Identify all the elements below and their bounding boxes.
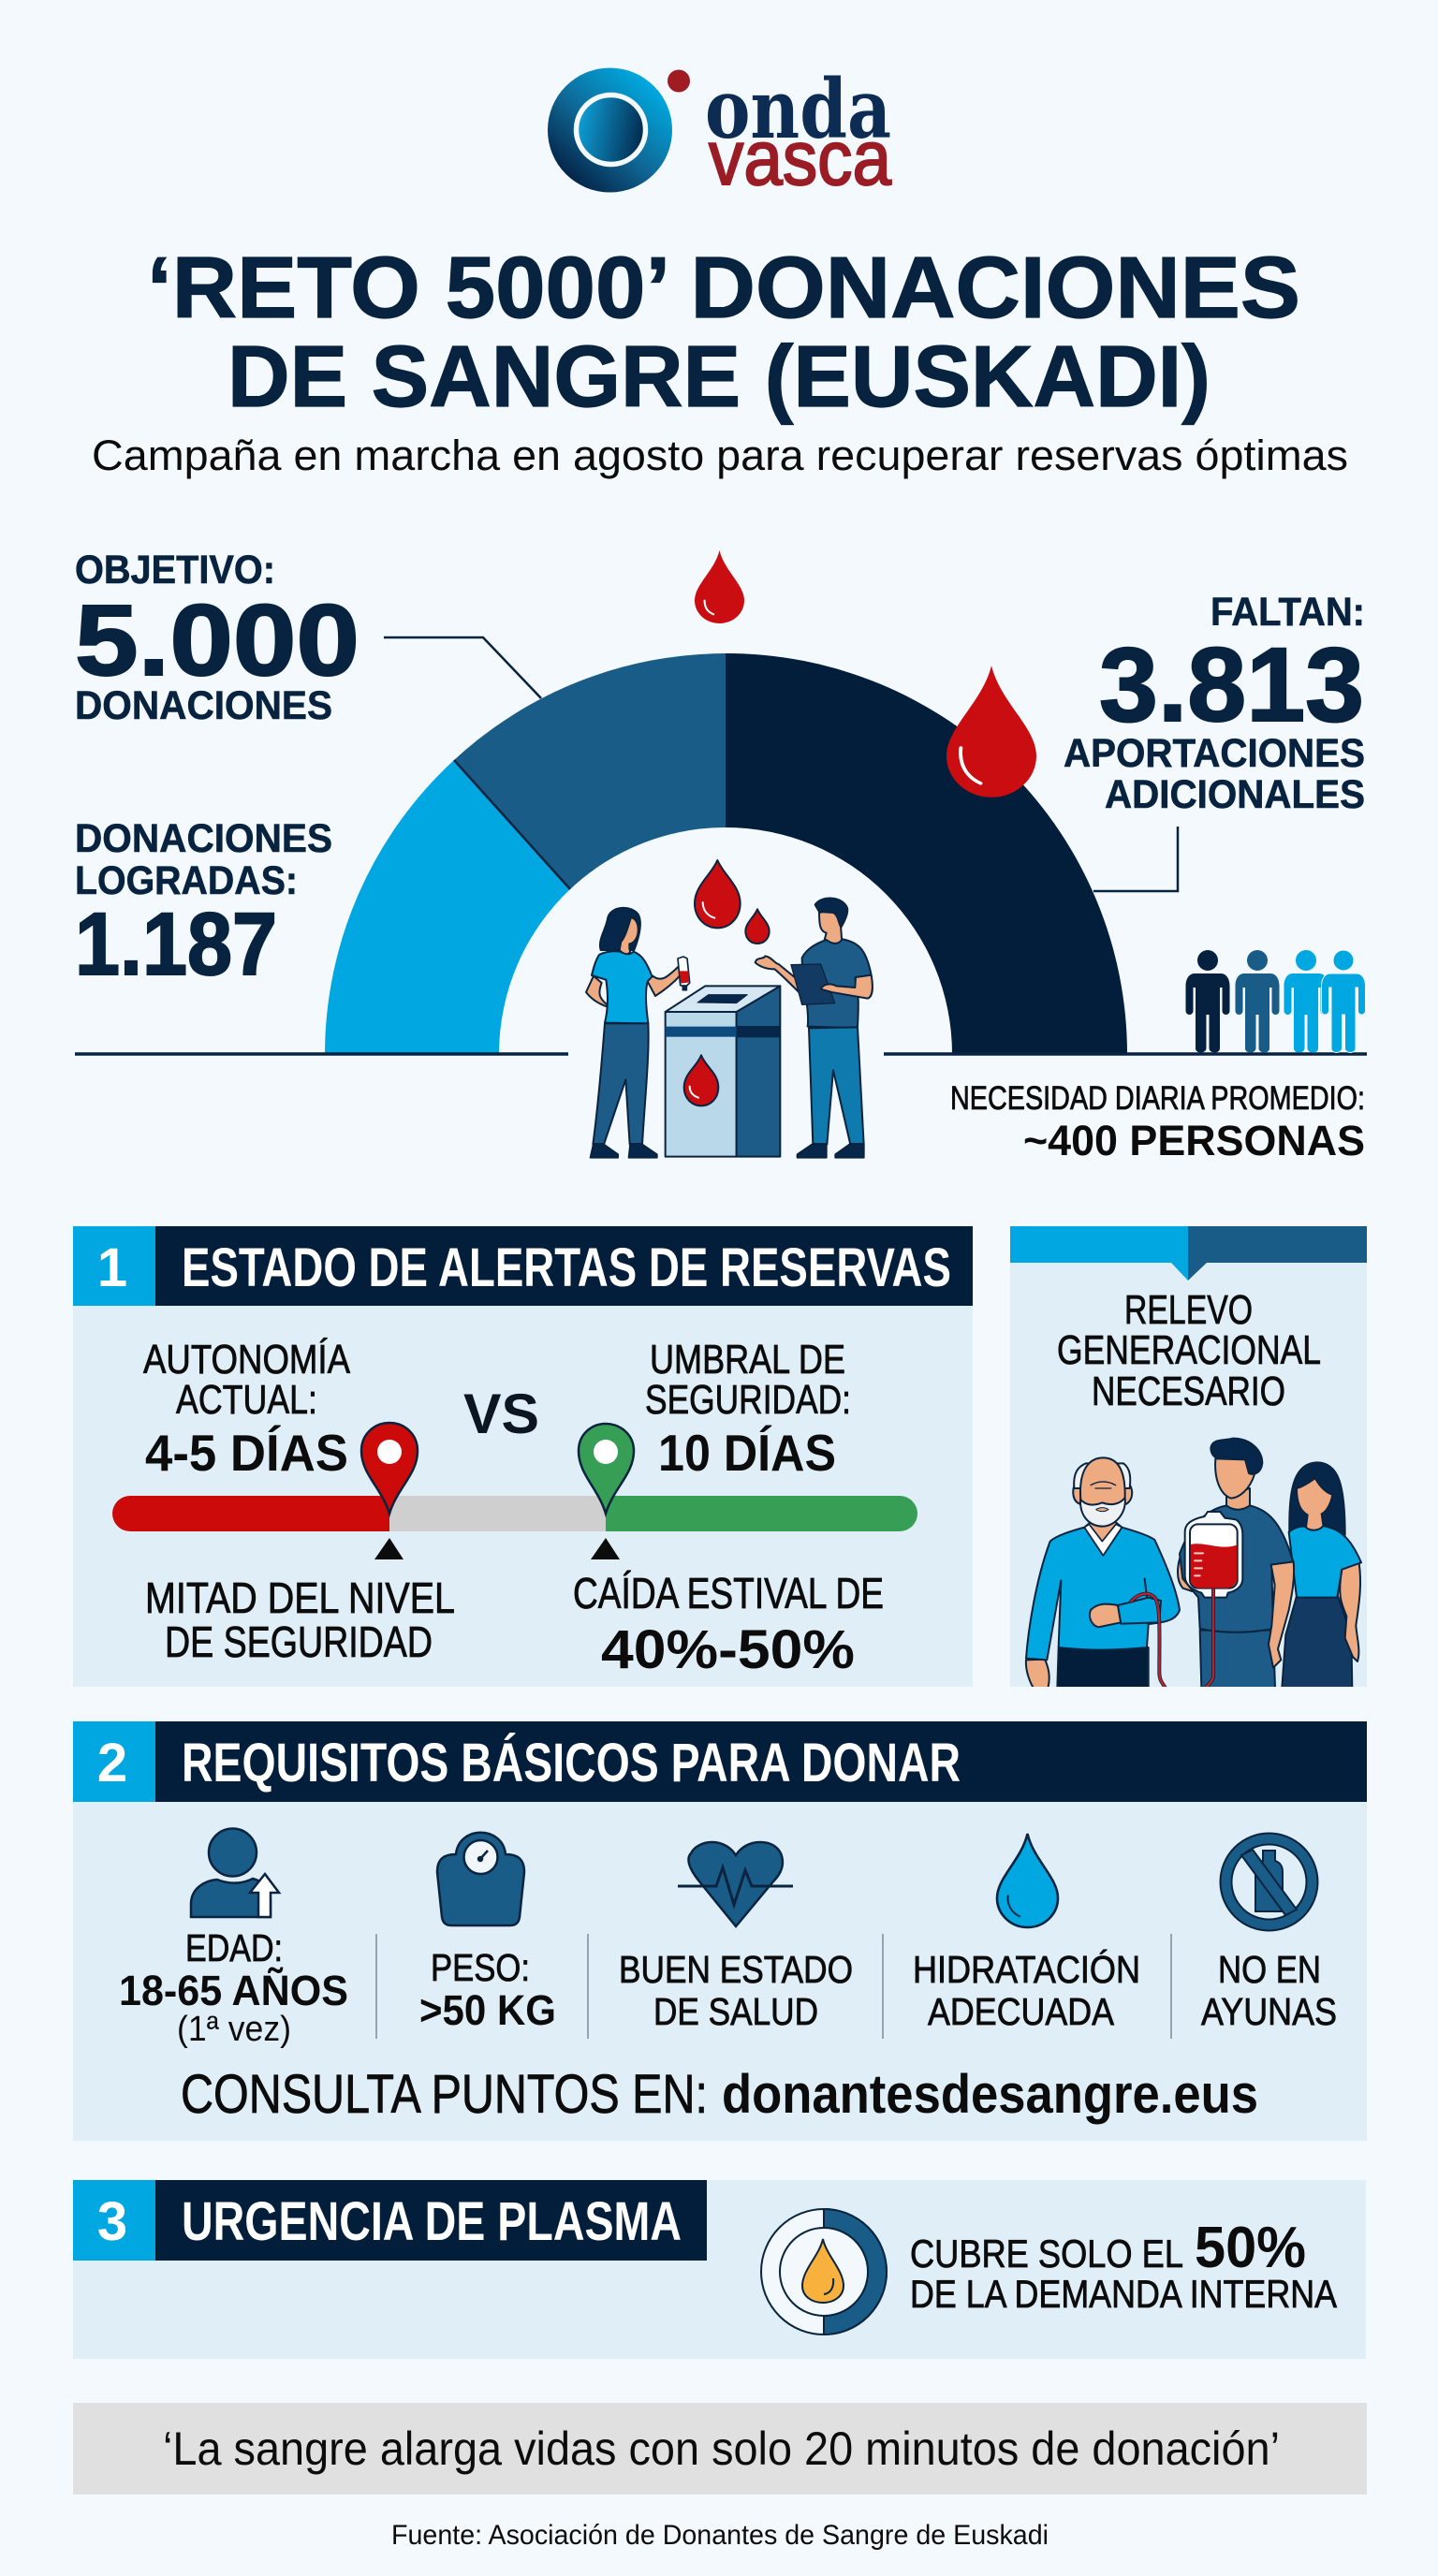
progress bar [112, 1496, 917, 1531]
text: caida estival [573, 1569, 884, 1680]
text: autonomia actual [143, 1337, 351, 1482]
icon: falling drops [695, 860, 770, 944]
baseline [75, 1052, 1367, 1056]
requirement: edad: 18-65 AÑOS [119, 1967, 348, 2014]
illustration: donors at the ballot box [586, 860, 873, 1158]
donation box [666, 986, 780, 1157]
title [147, 239, 1300, 425]
callout: faltan: ADICIONALES [1105, 772, 1365, 817]
logo: onda vasca [548, 61, 892, 201]
text: vs: VS [463, 1383, 539, 1445]
subtitle: Campaña en marcha en agosto para recuperar reservas óptimas [92, 432, 1348, 479]
section header 1: ESTADO DE ALERTAS DE RESERVAS [182, 1237, 951, 1298]
section header 3: 3 [97, 2191, 127, 2252]
icon: no food or drink [1221, 1833, 1318, 1930]
logo: onda vasca: onda [705, 61, 891, 157]
section header 3 [73, 2180, 707, 2261]
text: umbral de seguridad: UMBRAL DE [650, 1337, 845, 1383]
quote banner: ‘La sangre alarga vidas con solo 20 minutos de donación’ [163, 2422, 1280, 2475]
text: relevo: RELEVO [1124, 1287, 1253, 1333]
icon: weighing scale [437, 1833, 524, 1925]
separators [376, 1934, 1171, 2039]
text: umbral de seguridad [645, 1337, 851, 1482]
text: caida estival: 40%-50% [601, 1619, 855, 1680]
section header 3: URGENCIA DE PLASMA [182, 2191, 682, 2252]
text: consulta puntos: CONSULTA PUNTOS EN: [181, 2064, 708, 2125]
section header 1 [73, 1226, 973, 1306]
text: autonomia actual: AUTONOMÍA [143, 1337, 351, 1383]
text: autonomia actual: ACTUAL: [176, 1377, 317, 1423]
logo: onda vasca: vasca [709, 114, 892, 201]
text: cubre solo el 50%: 50% [1195, 2216, 1306, 2280]
callout: donaciones logradas: 1.187 [75, 895, 277, 994]
callout: necesidad diaria: ~400 PERSONAS [1023, 1117, 1365, 1164]
panel: estado de alertas [73, 1226, 973, 1687]
connector: faltan [1093, 827, 1178, 891]
callout: faltan: FALTAN: [1211, 590, 1365, 635]
requirement: buen estado: DE SALUD [653, 1990, 818, 2033]
icon: top blood drop [695, 550, 744, 623]
source: Fuente: Asociación de Donantes de Sangre de Euskadi [391, 2520, 1049, 2551]
text: mitad del nivel [145, 1573, 455, 1666]
woman [586, 908, 690, 1158]
title: DE SANGRE (EUSKADI) [227, 328, 1211, 425]
ribbon with notch [1010, 1226, 1367, 1281]
icon: person with arrow [191, 1829, 279, 1917]
callout: necesidad diaria [950, 1080, 1365, 1164]
section header 2: REQUISITOS BÁSICOS PARA DONAR [182, 1733, 961, 1793]
requirement: buen estado [619, 1948, 853, 2033]
text: umbral de seguridad: 10 DÍAS [658, 1424, 836, 1482]
icon: row of people [1185, 950, 1365, 1052]
panel: requisitos basicos [73, 1721, 1367, 2141]
text: mitad del nivel: MITAD DEL NIVEL [145, 1573, 455, 1622]
callout: faltan: APORTACIONES [1064, 731, 1365, 776]
text: relevo: GENERACIONAL [1057, 1327, 1321, 1373]
callout: objetivo: 5.000 [75, 583, 360, 696]
callout: objetivo: OBJETIVO: [75, 548, 275, 593]
requirement: peso [419, 1946, 556, 2034]
blood tubes [1131, 1589, 1213, 1688]
panel: relevo generacional [1010, 1226, 1367, 1688]
text: cubre solo el 50%: CUBRE SOLO EL [910, 2232, 1183, 2276]
text: cubre solo el 50%: DE LA DEMANDA INTERNA [910, 2272, 1337, 2316]
requirement: peso: >50 KG [419, 1986, 556, 2034]
requirement: ayunas: AYUNAS [1201, 1990, 1337, 2033]
requirement: edad: EDAD: [185, 1926, 283, 1969]
panel: urgencia de plasma [73, 2180, 1366, 2359]
semicircle gauge [325, 653, 1127, 1054]
man [756, 899, 873, 1158]
text: caida estival: CAÍDA ESTIVAL DE [573, 1569, 884, 1617]
icon: blood vial [678, 957, 690, 990]
callout: faltan: 3.813 [1099, 626, 1364, 743]
callout: faltan [1064, 590, 1365, 817]
young woman [1282, 1462, 1361, 1688]
text: mitad del nivel: DE SEGURIDAD [165, 1617, 433, 1666]
icon: plasma ring [761, 2209, 887, 2334]
requirement: hidratacion: HIDRATACIÓN [913, 1948, 1140, 1991]
markers [374, 1538, 620, 1559]
requirement: buen estado: BUEN ESTADO [619, 1948, 853, 1991]
callout: donaciones logradas: DONACIONES [75, 816, 332, 861]
requirement: peso: PESO: [431, 1946, 530, 1989]
requirement: ayunas [1201, 1948, 1337, 2033]
text: relevo: NECESARIO [1092, 1368, 1285, 1414]
text: consulta puntos: donantesdesangre.eus [722, 2064, 1258, 2125]
icon: red pin [361, 1423, 418, 1514]
section header 1: 1 [97, 1237, 127, 1298]
requirement: hidratacion [913, 1948, 1140, 2033]
icon: water drop [997, 1834, 1058, 1927]
icon: blood bag [1185, 1512, 1242, 1598]
callout: objetivo: DONACIONES [75, 683, 332, 728]
callout: donaciones logradas [75, 816, 332, 994]
text: relevo [1057, 1287, 1321, 1414]
text: cubre solo el 50% [910, 2216, 1337, 2316]
requirement: ayunas: NO EN [1218, 1948, 1321, 1991]
section header 2 [73, 1721, 1367, 1802]
callout: objetivo [75, 548, 360, 728]
icon: green pin [579, 1424, 634, 1514]
text: consulta puntos [181, 2064, 1258, 2125]
title: ‘RETO 5000’ DONACIONES [147, 239, 1300, 336]
requirement: hidratacion: ADECUADA [928, 1990, 1115, 2033]
text: autonomia actual: 4-5 DÍAS [145, 1424, 348, 1482]
quote banner [73, 2403, 1367, 2495]
young man [1178, 1439, 1294, 1688]
section header 2: 2 [97, 1733, 127, 1793]
old man [1026, 1457, 1180, 1688]
text: umbral de seguridad: SEGURIDAD: [645, 1377, 851, 1423]
icon: large blood drop [946, 666, 1036, 798]
requirement: edad: (1ª vez) [177, 2010, 291, 2049]
illustration: three generations [1026, 1439, 1361, 1688]
connector: objetivo [384, 637, 541, 698]
requirement: edad [119, 1926, 348, 2049]
callout: donaciones logradas: LOGRADAS: [75, 858, 298, 903]
icon: heart with pulse [678, 1842, 793, 1926]
